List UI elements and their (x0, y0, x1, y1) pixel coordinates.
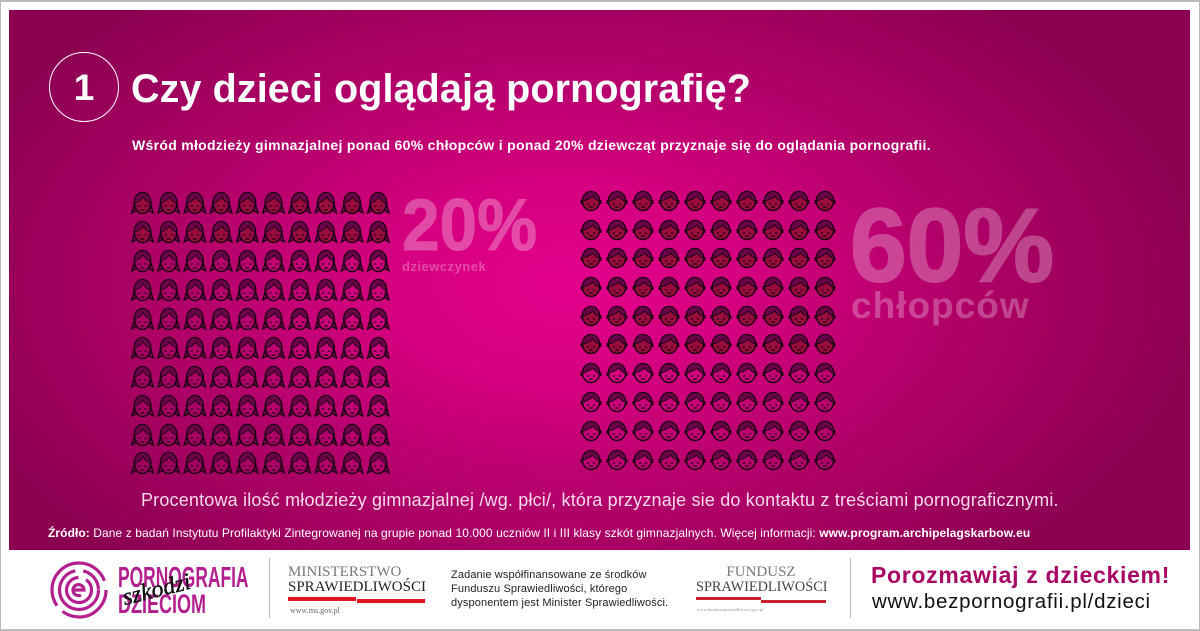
text: ministerstwo: MINISTERSTWO (288, 564, 401, 580)
chart: boys 60% pictogram (582, 192, 834, 470)
title: Czy dzieci oglądają pornografię? (131, 67, 751, 111)
logo text: PORNOGRAFIA (118, 562, 248, 594)
caption: Procentowa ilość młodzieży gimnazjalnej /wg. płci/, która przyznaje sie do kontaktu z treściami pornograficznymi. (141, 490, 1059, 510)
flag stripes lower (761, 600, 826, 603)
flag stripes lower (357, 599, 425, 603)
logo: Fundusz Sprawiedliwości (696, 564, 828, 612)
divider (269, 558, 270, 618)
chart: girls 20% pictogram (132, 192, 389, 474)
call to action: Porozmawiaj z dzieckiem! (871, 562, 1170, 588)
funding note: Zadanie współfinansowane ze środków (451, 569, 647, 581)
signature: szkodzi: szkodzi (120, 569, 193, 611)
logo: Ministerstwo Sprawiedliwości (288, 564, 426, 615)
funding note: dysponentem jest Minister Sprawiedliwości. (451, 597, 668, 609)
funding note: Funduszu Sprawiedliwości, którego (451, 583, 627, 595)
divider (850, 558, 851, 618)
url: www.funduszsprawiedliwosci.gov.pl (697, 607, 763, 612)
badge: number 1: 1 (74, 67, 94, 108)
logo text second line: DZIECIOM (118, 589, 206, 619)
badge: number 1 (49, 52, 119, 122)
source note: Źródło: Dane z badań Instytutu Profilaktyki Zintegrowanej na grupie ponad 10.000 uczniów II i III klasy szkót gimnazjalnych. Więcej informacji: www.program.archipelagskarbow.eu (48, 526, 1030, 540)
flag stripes (288, 597, 356, 601)
website url: www.bezpornografii.pl/dzieci (872, 590, 1151, 613)
funding note (451, 569, 668, 609)
text: sprawiedliwości: SPRAWIEDLIWOŚCI (288, 579, 426, 595)
subtitle: Wśród młodzieży gimnazjalnej ponad 60% chłopców i ponad 20% dziewcząt przyznaje się do oglądania pornografii. (132, 137, 931, 153)
text: fundusz: FUNDUSZ (726, 564, 796, 580)
label: dziewczynek: dziewczynek (402, 259, 486, 274)
icon: spiral (50, 561, 108, 619)
logo: Pornografia szkodzi dzieciom (50, 561, 248, 619)
stat: 20% girls: 20% (402, 185, 537, 266)
text: sprawiedliwości: SPRAWIEDLIWOŚCI (696, 579, 828, 595)
url: www.ms.gov.pl (290, 606, 340, 615)
flag stripes (696, 597, 761, 600)
label: chłopców: chłopców (851, 285, 1030, 326)
stat: 60% boys: 60% (850, 188, 1054, 304)
